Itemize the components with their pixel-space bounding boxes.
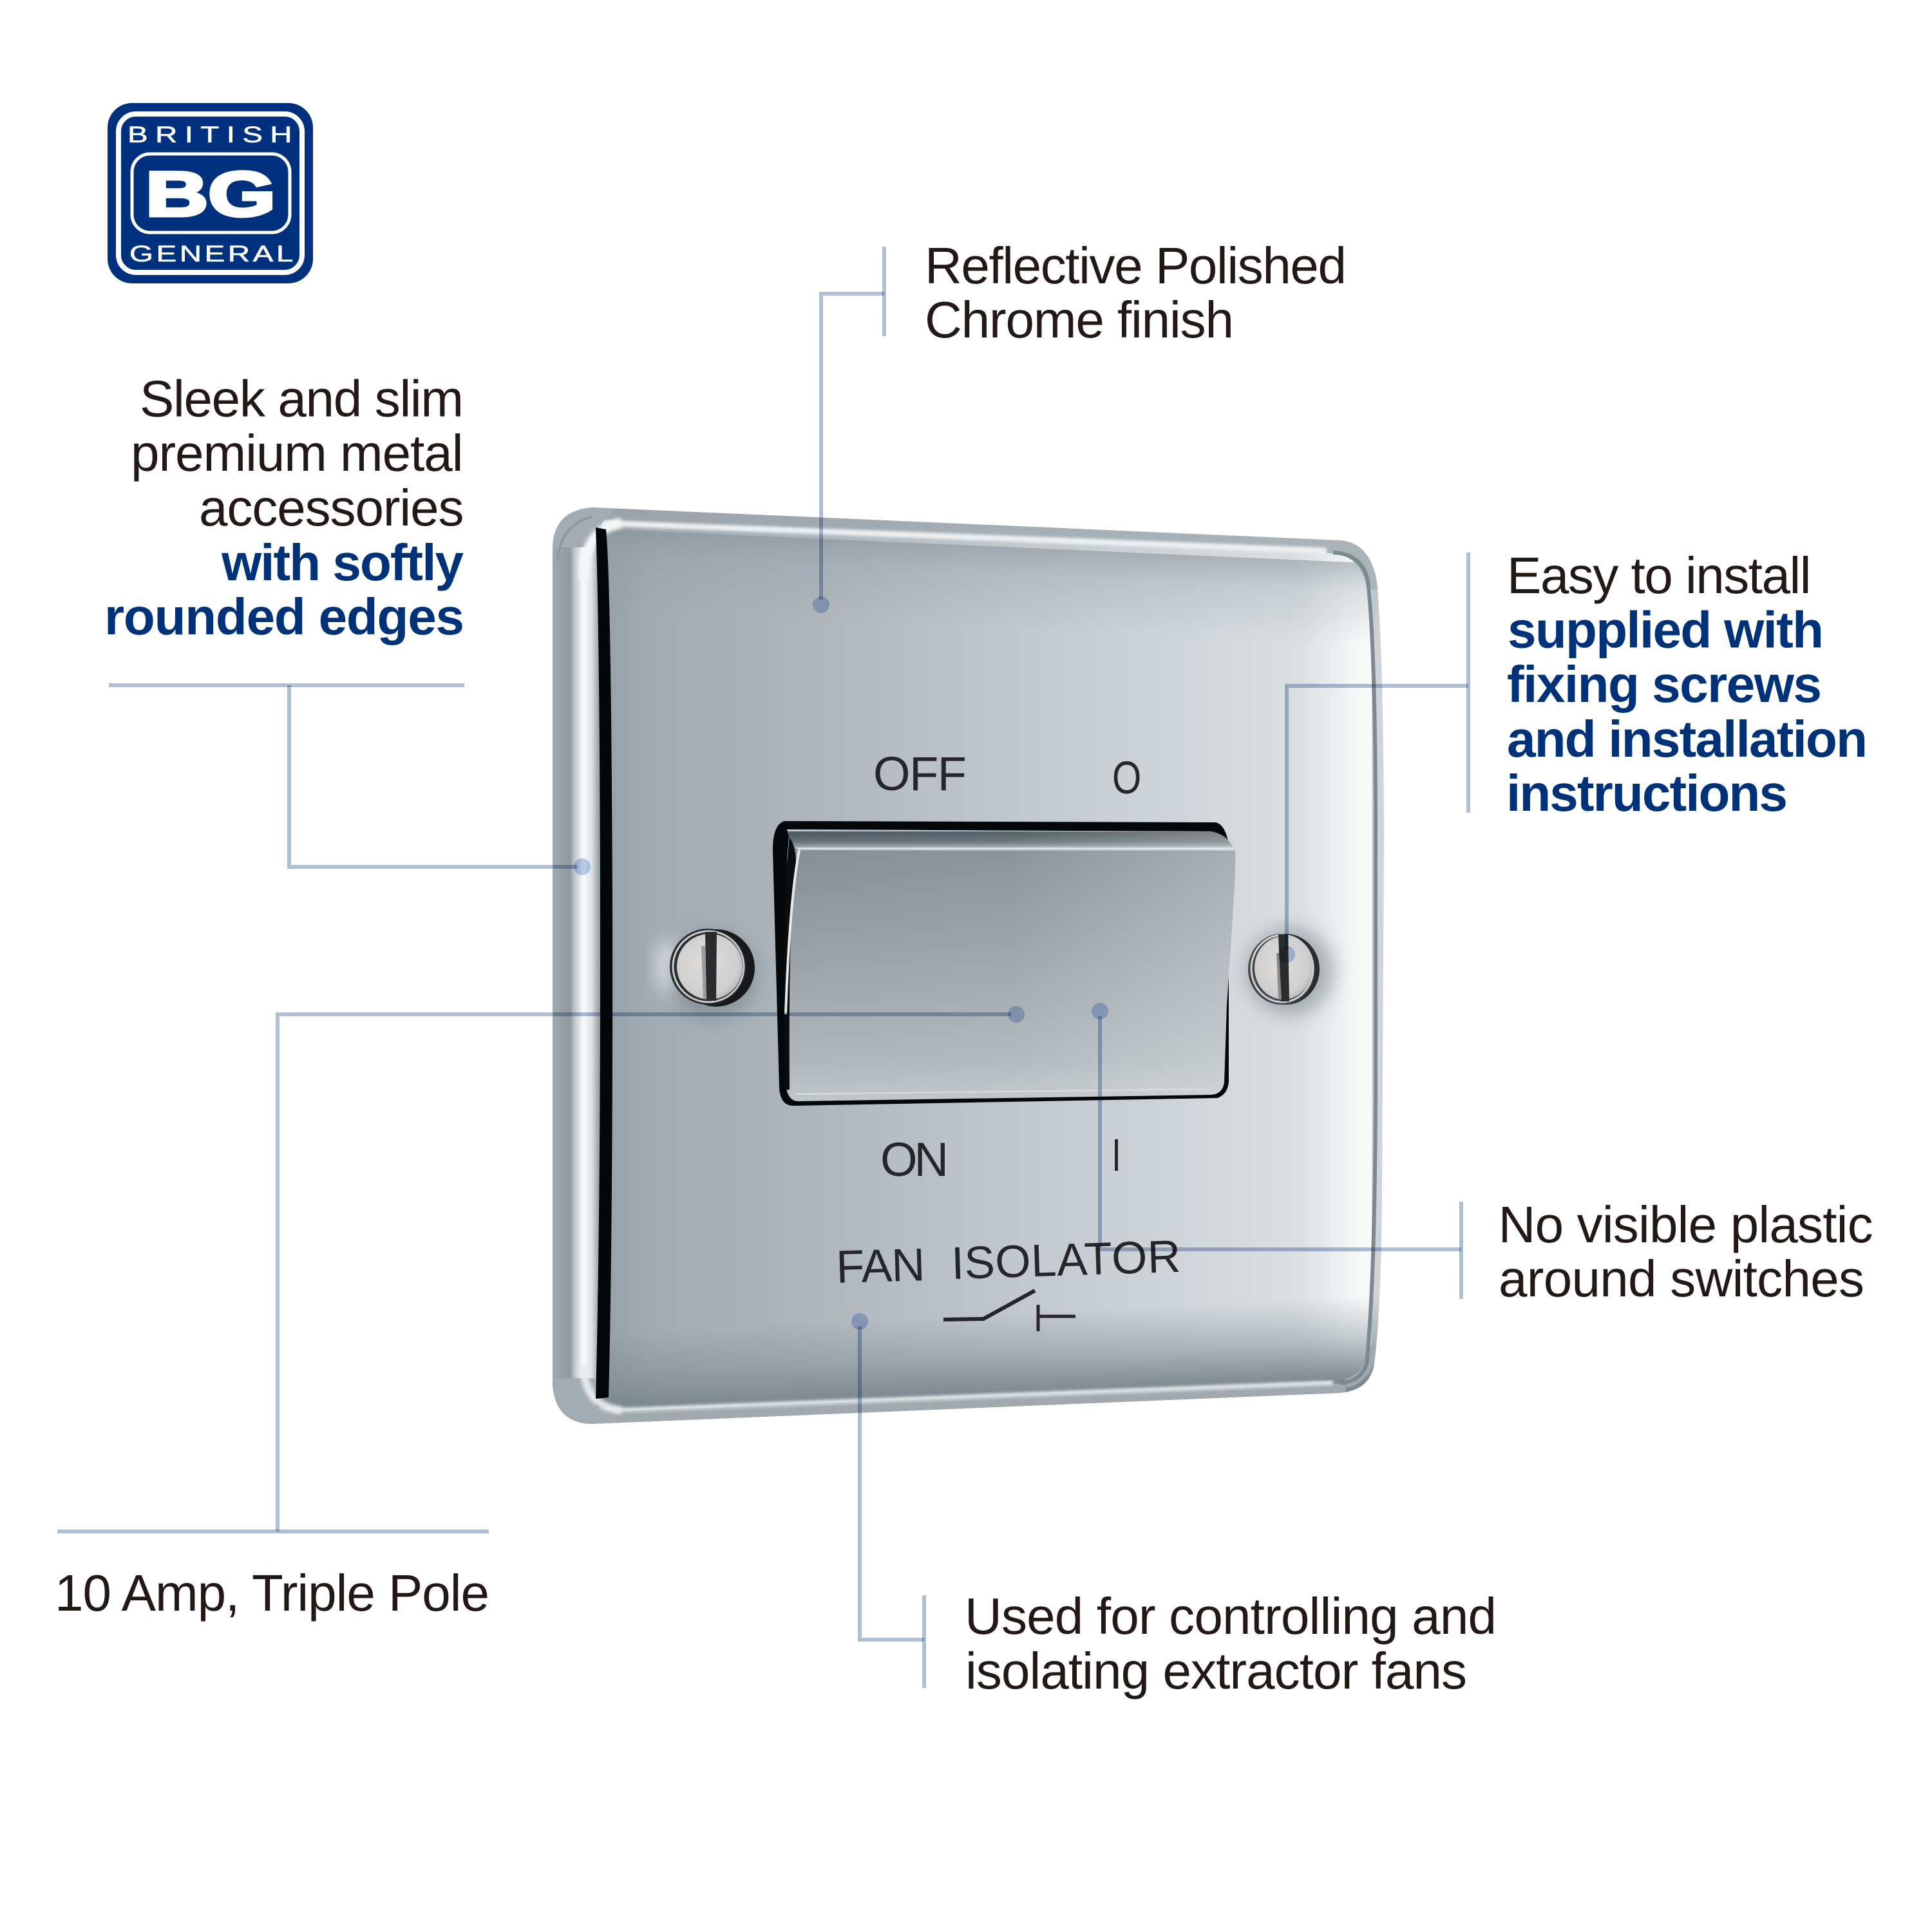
callout text: instructions — [1506, 764, 1788, 822]
callout: 10 amp triple pole — [55, 1006, 1025, 1622]
callout text: and installation — [1507, 710, 1868, 768]
callout text: with softly — [221, 534, 464, 591]
callout text — [1506, 547, 1868, 822]
callout text: Used for controlling and — [965, 1587, 1497, 1645]
left screw — [658, 929, 757, 1019]
plate marking: FAN: FAN — [835, 1239, 925, 1293]
callout text — [925, 237, 1347, 348]
logo: British General — [108, 103, 313, 283]
leader line and dot — [1278, 553, 1468, 963]
callout text: isolating extractor fans — [965, 1642, 1467, 1700]
callout: controlling and isolating extractor fans — [851, 1313, 1497, 1700]
logo: British General: BRITISH — [128, 122, 292, 147]
leader line and dot — [813, 247, 884, 613]
callout text: Reflective Polished — [925, 237, 1347, 294]
logo: British General: GENERAL — [129, 241, 293, 267]
leader line and dot — [109, 685, 591, 875]
callout text — [1499, 1196, 1873, 1307]
callout text: Sleek and slim — [140, 370, 464, 428]
recess — [773, 821, 1229, 1106]
plate marking: ISOLATOR: ISOLATOR — [951, 1231, 1181, 1289]
plate marking: OFF: OFF — [873, 747, 967, 800]
callout: reflective polished chrome finish — [813, 237, 1347, 613]
right screw — [1247, 927, 1334, 1015]
callout text: supplied with — [1508, 601, 1824, 658]
callout text: fixing screws — [1507, 656, 1822, 713]
callout text: rounded edges — [104, 588, 464, 645]
isolator switch symbol — [943, 1291, 1075, 1331]
callout text: Chrome finish — [925, 291, 1234, 348]
callout: easy to install — [1278, 547, 1868, 963]
rocker top bevel — [787, 829, 1235, 853]
callout text: 10 Amp, Triple Pole — [55, 1564, 489, 1622]
callout text: accessories — [199, 479, 464, 536]
leader line and dot — [851, 1313, 924, 1688]
rocker switch — [773, 821, 1235, 1106]
plate marking: O: O — [1112, 752, 1141, 803]
callout text — [965, 1587, 1497, 1700]
logo: British General: BG — [146, 158, 276, 229]
plate body — [553, 507, 1384, 1424]
callout text: around switches — [1499, 1250, 1864, 1307]
leader line and dot — [57, 1006, 1025, 1531]
callout text: Easy to install — [1507, 547, 1811, 604]
callout: sleek and slim — [104, 370, 591, 875]
callout text: No visible plastic — [1499, 1196, 1873, 1253]
leader line and dot — [1092, 1003, 1461, 1299]
callout text — [104, 370, 464, 645]
plate marking: I — [1115, 1139, 1118, 1171]
plate marking: ON: ON — [880, 1133, 949, 1186]
rocker face — [784, 829, 1235, 1101]
plate bevels and reflections — [547, 502, 1391, 1433]
callout text: premium metal — [131, 424, 464, 482]
chrome switch plate — [547, 502, 1391, 1433]
callout: no visible plastic — [1092, 1003, 1873, 1307]
